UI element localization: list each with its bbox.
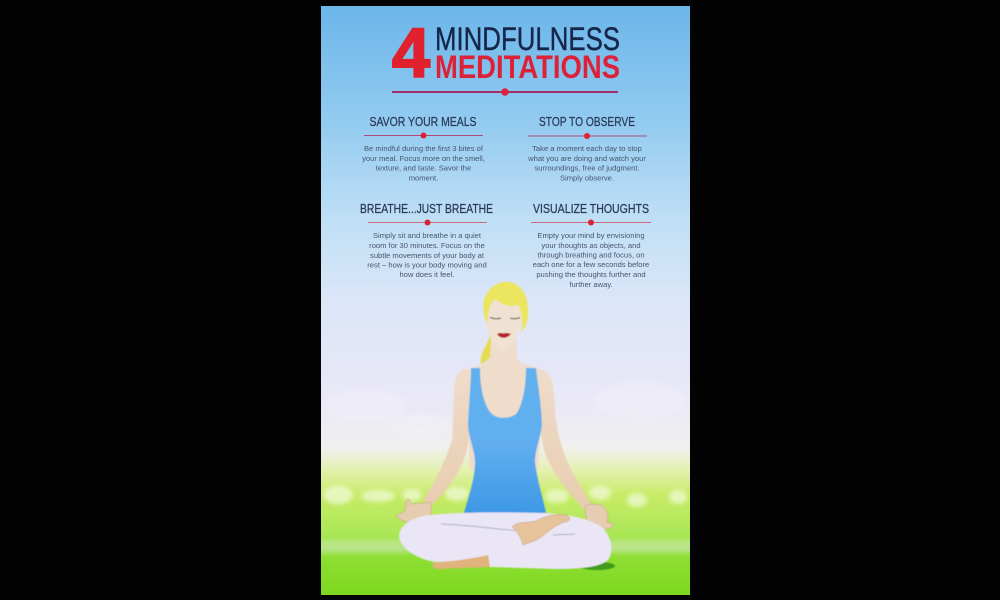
leg crease (441, 524, 575, 535)
body text: Be mindful during the first 3 bites of (364, 144, 484, 153)
body text: through breathing and focus, on (537, 250, 645, 260)
body text: surroundings, free of judgment. (534, 164, 640, 172)
body text: what you are doing and watch your (527, 154, 646, 163)
body text: texture, and taste. Savor the (376, 164, 471, 172)
panel: breathe (360, 202, 493, 279)
right arm (535, 369, 592, 510)
hands (396, 499, 614, 530)
heading: VISUALIZE THOUGHTS (533, 202, 649, 216)
hair (483, 282, 528, 332)
ponytail (481, 332, 495, 364)
panel: visualize thoughts (531, 202, 651, 289)
body text: subtle movements of your body at (370, 251, 485, 260)
body text: how does it feel. (400, 270, 454, 279)
body text (362, 144, 485, 182)
divider (364, 132, 483, 138)
ground shadow (579, 562, 615, 570)
heading: BREATHE...JUST BREATHE (360, 202, 493, 216)
divider (368, 220, 487, 226)
body text: Simply observe. (560, 174, 614, 182)
panel: infographic background (321, 6, 690, 595)
body text: your thoughts as objects, and (541, 241, 641, 250)
head (484, 294, 523, 352)
body text: pushing the thoughts further and (536, 270, 646, 279)
background clouds and meadow (321, 484, 690, 556)
title line: meditations: MEDITATIONS (435, 49, 620, 85)
divider (531, 220, 651, 226)
torso skin (460, 338, 548, 470)
heading: STOP TO OBSERVE (539, 115, 635, 129)
title divider (392, 88, 618, 96)
lips (497, 333, 511, 338)
body text: your meal. Focus more on the smell, (362, 154, 485, 163)
body text: Simply sit and breathe in a quiet (373, 231, 482, 240)
illustration: meditating woman (396, 282, 615, 570)
divider (528, 133, 647, 139)
lower foot (433, 555, 490, 569)
blue tank top (464, 368, 546, 513)
title (392, 14, 620, 92)
body text: Take a moment each day to stop (532, 144, 642, 153)
panel: stop to observe (527, 115, 647, 182)
body text: room for 30 minutes. Focus on the (369, 241, 485, 250)
body text: Empty your mind by envisioning (537, 231, 645, 240)
closed eyes (490, 318, 520, 319)
body text (533, 231, 649, 289)
left arm (423, 369, 472, 505)
body text: each one for a few seconds before (533, 260, 649, 269)
title line: mindfulness: MINDFULNESS (435, 21, 620, 57)
body text (367, 231, 487, 279)
body text (527, 144, 646, 182)
heading: SAVOR YOUR MEALS (370, 115, 476, 129)
white trousers (399, 512, 611, 569)
body text: further away. (569, 280, 613, 289)
upper foot (512, 514, 570, 545)
body text: rest – how is your body moving and (367, 260, 487, 270)
panel: savor your meals (362, 115, 485, 182)
title numeral 4: 4 (392, 14, 430, 92)
body text: moment. (409, 174, 438, 182)
